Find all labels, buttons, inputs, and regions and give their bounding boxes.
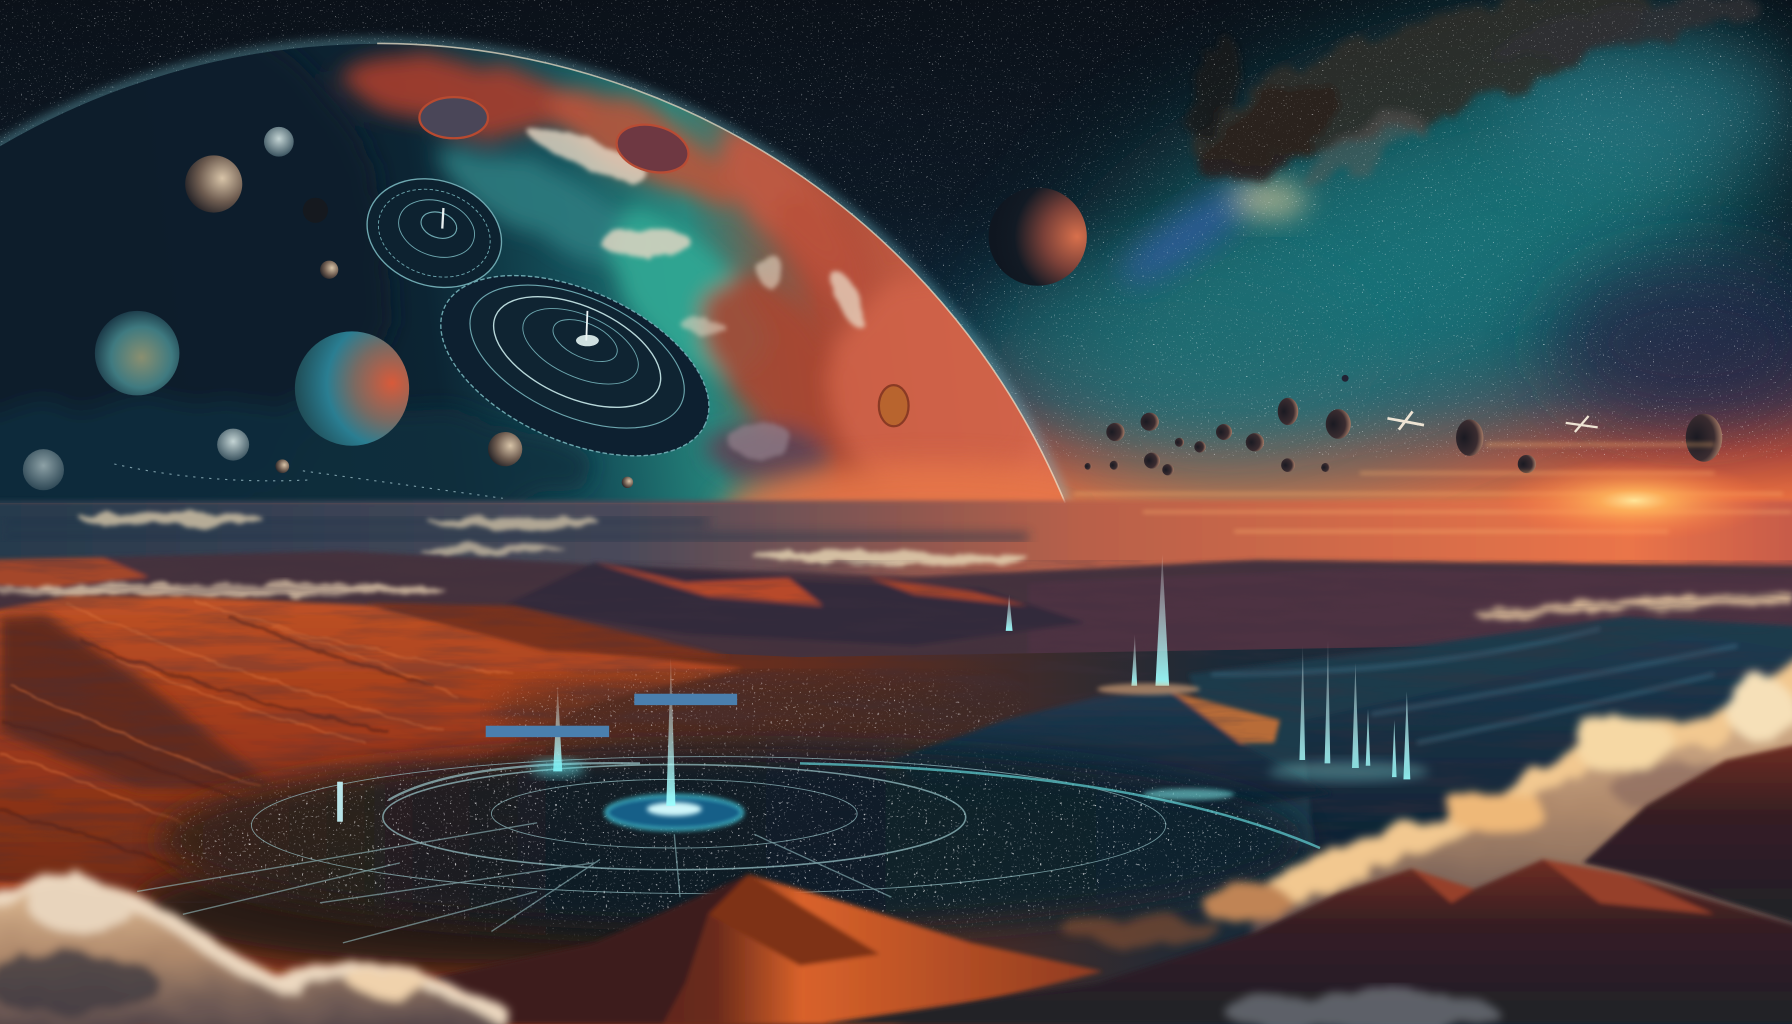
small moons over planet: [23, 127, 633, 498]
giant planet: [0, 32, 1073, 503]
atmosphere rim: [0, 44, 1065, 789]
setting sun glow: [1497, 459, 1771, 542]
central hub: [606, 795, 743, 830]
nebula and milky way: [971, 0, 1792, 563]
star field: [0, 0, 1792, 457]
planet surface colour masses: [0, 44, 1003, 501]
glowing towers and solar panels: [337, 554, 1429, 822]
moon chain over horizon: [1085, 375, 1722, 475]
foreground cloud right: [1223, 991, 1497, 1024]
ridge lines: [0, 601, 514, 846]
city rings: [137, 757, 1320, 943]
distant ridges: [0, 551, 1792, 709]
foreground right mountains: [823, 859, 1792, 1024]
planet warm fade to horizon: [707, 453, 1063, 503]
right back hills: [1189, 592, 1792, 869]
white cloud patches: [522, 117, 871, 458]
dark dust lanes: [1174, 0, 1761, 201]
central plain: [0, 640, 1792, 1024]
lower city shadow: [137, 845, 869, 973]
foreground cloud left: [0, 874, 503, 1024]
right cloud bank: [1063, 657, 1792, 960]
orbital disc station large: [414, 239, 736, 493]
central blue ridge with settlement: [891, 691, 1331, 823]
terrain strata texture: [0, 560, 1792, 903]
foreground central dune: [434, 874, 1103, 1024]
winged craft: [1387, 411, 1598, 432]
large moon in open sky: [989, 187, 1087, 286]
orbital disc station small: [353, 162, 516, 304]
far right dark mountain: [1583, 743, 1792, 926]
left orange mountains: [0, 597, 743, 897]
high cloud strips: [80, 512, 1029, 565]
horizon haze band: [0, 445, 1792, 578]
lit limb highlight: [377, 43, 1065, 503]
craters: [419, 97, 488, 138]
circular city on the plain: [137, 743, 1326, 949]
far city lights: [480, 669, 1029, 760]
low cloud bank left: [0, 583, 446, 597]
